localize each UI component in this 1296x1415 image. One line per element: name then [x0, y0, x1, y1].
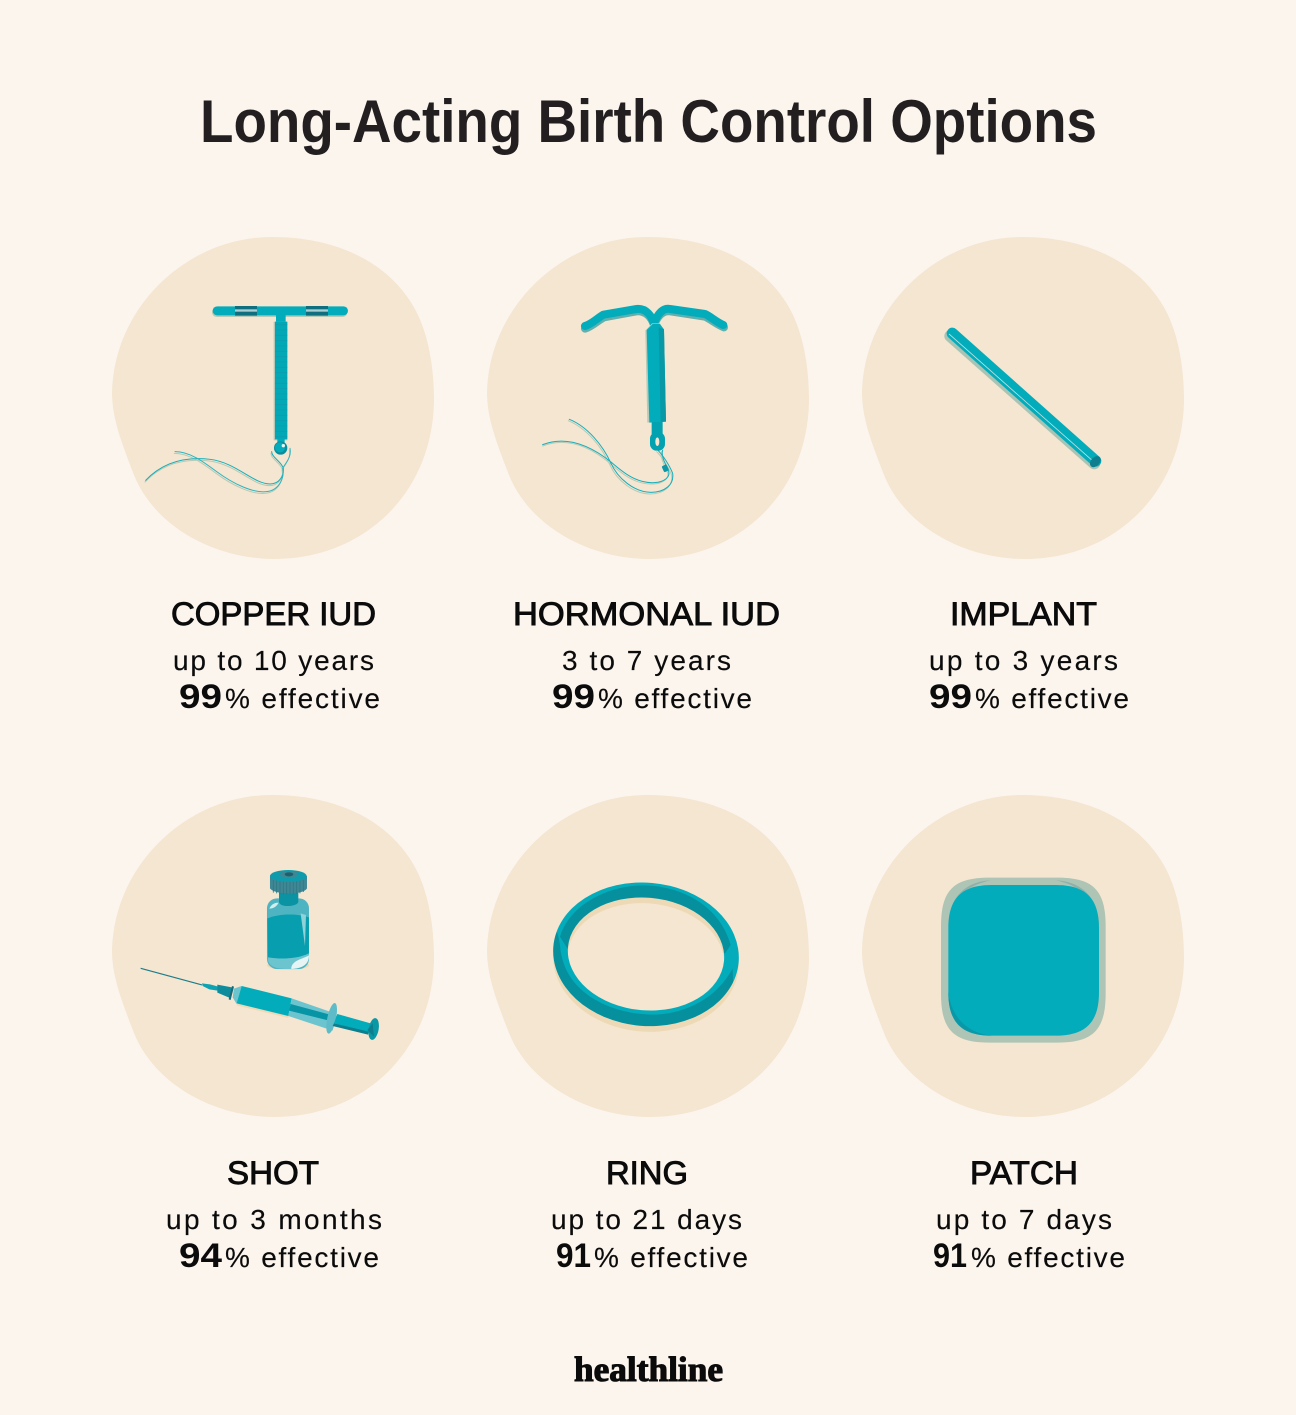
label: implant — [929, 596, 1129, 716]
label: hormonal IUD: 99 — [552, 678, 595, 716]
label: implant: 99 — [929, 678, 972, 716]
label: copper IUD: COPPER IUD — [171, 596, 376, 632]
background blob: copper IUD — [112, 237, 434, 559]
icon: vaginal ring — [553, 882, 739, 1032]
background blob: implant — [862, 237, 1184, 559]
label: copper IUD: up to 10 years — [173, 645, 374, 676]
label: hormonal IUD — [513, 596, 780, 716]
label: shot: SHOT — [227, 1155, 319, 1191]
label: ring: 91 — [556, 1237, 591, 1275]
icon: vial — [267, 870, 309, 970]
label: shot — [166, 1155, 382, 1275]
icon: copper IUD — [145, 306, 348, 494]
icon: vial and syringe — [141, 870, 380, 1041]
label: shot: 94 — [179, 1237, 222, 1275]
label: patch: up to 7 days — [936, 1204, 1112, 1235]
label: patch: PATCH — [970, 1155, 1078, 1191]
panel: ring — [487, 795, 809, 1275]
label: hormonal IUD: 3 to 7 years — [562, 645, 731, 676]
label: shot: up to 3 months — [166, 1204, 382, 1235]
label: ring: up to 21 days — [551, 1204, 742, 1235]
icon: syringe — [141, 968, 380, 1041]
label: hormonal IUD: HORMONAL IUD — [513, 596, 780, 632]
label: patch — [933, 1155, 1125, 1275]
label: implant: % effective — [975, 683, 1129, 714]
label: ring — [551, 1155, 748, 1275]
background blob: shot — [112, 795, 434, 1117]
label: implant: up to 3 years — [929, 645, 1118, 676]
icon: hormonal IUD — [543, 309, 724, 494]
panel: copper IUD — [112, 237, 434, 716]
panel: implant — [862, 237, 1184, 716]
icon: patch — [941, 878, 1106, 1043]
label: ring: RING — [606, 1155, 688, 1191]
label: ring: % effective — [594, 1242, 748, 1273]
label: copper IUD: % effective — [225, 683, 380, 714]
logo: healthline: healthline — [574, 1350, 723, 1389]
panel: shot — [112, 795, 434, 1275]
title: Long-Acting Birth Control Options — [200, 88, 1097, 155]
label: copper IUD — [171, 596, 380, 716]
label: hormonal IUD: % effective — [598, 683, 752, 714]
background blob: hormonal IUD — [487, 237, 809, 559]
label: shot: % effective — [225, 1242, 379, 1273]
panel: patch — [862, 795, 1184, 1275]
panel: hormonal IUD — [487, 237, 809, 716]
label: copper IUD: 99 — [179, 678, 222, 716]
label: patch: % effective — [971, 1242, 1125, 1273]
icon: implant rod — [949, 333, 1103, 469]
label: implant: IMPLANT — [950, 596, 1097, 632]
background blob: ring — [487, 795, 809, 1117]
label: patch: 91 — [933, 1237, 967, 1275]
background blob: patch — [862, 795, 1184, 1117]
